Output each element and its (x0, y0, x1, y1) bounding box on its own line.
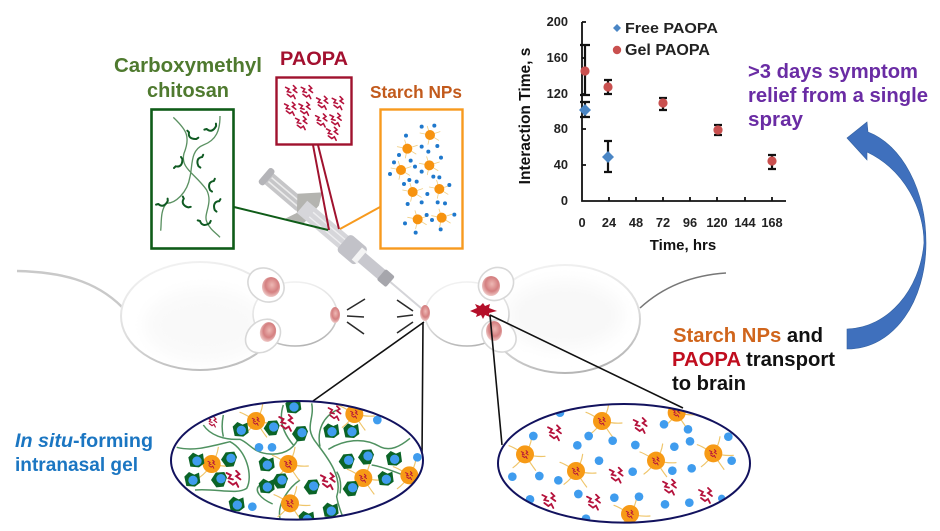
free blue dots (248, 416, 422, 511)
left ellipse: gel composition (171, 397, 429, 526)
ear bottom (476, 313, 522, 359)
axes (582, 22, 786, 201)
x tick labels: 168 (761, 215, 783, 230)
nanoparticles (509, 396, 733, 530)
scatter chart: interaction time (517, 14, 786, 254)
label: in situ-forming intranasal gel: intranasal gel (15, 454, 138, 476)
head (253, 282, 337, 346)
free PAOPA points (579, 104, 614, 163)
x tick labels: 120 (706, 215, 728, 230)
label: Carboxymethyl chitosan: Carboxymethyl (114, 54, 262, 77)
label: Carboxymethyl chitosan (114, 54, 262, 102)
right ellipse: gel released in brain (498, 396, 750, 530)
inner ear top (482, 276, 500, 296)
gel chains (177, 403, 410, 518)
body (490, 265, 640, 373)
y tick labels (547, 14, 568, 208)
peptide squiggles (285, 86, 344, 140)
y tick labels: 160 (547, 50, 568, 65)
nanoparticles (196, 397, 429, 519)
whiskers right mouse (397, 300, 413, 333)
y tick labels: 0 (561, 193, 568, 208)
x tick labels: 96 (683, 215, 697, 230)
PAOPA squiggles (208, 406, 341, 489)
inner ear bottom (258, 320, 278, 344)
whiskers left mouse (347, 299, 365, 334)
label: PAOPA: PAOPA (280, 49, 348, 70)
nanoparticles and blue dots (388, 124, 456, 235)
x tick labels: 48 (629, 215, 643, 230)
panel: starch NPs box (380, 110, 462, 248)
legend (613, 21, 719, 59)
left mouse (17, 261, 340, 370)
right mouse (420, 261, 726, 373)
y tick labels: 80 (554, 121, 568, 136)
legend: Gel PAOPA (625, 42, 710, 59)
ellipse outline (498, 404, 750, 523)
label: in situ-forming intranasal gel (15, 430, 153, 476)
x tick labels: 24 (602, 215, 617, 230)
callout: symptom relief: spray (748, 109, 804, 131)
blue dots (508, 408, 736, 523)
callout: transport to brain: to brain (672, 373, 746, 395)
callout: transport to brain: Starch NPs and (673, 325, 823, 347)
x tick labels: 72 (656, 215, 670, 230)
x tick labels (578, 215, 783, 230)
ear top (472, 261, 520, 307)
inner ear bottom (486, 321, 502, 341)
callout: symptom relief (748, 61, 928, 131)
y tick labels: 120 (547, 86, 568, 101)
ear bottom (239, 312, 287, 360)
panel: carboxymethyl chitosan box (152, 110, 234, 248)
label: Starch NPs: Starch NPs (370, 82, 462, 102)
y axis title: Interaction Time, s (517, 48, 534, 184)
head (425, 282, 509, 346)
x axis title: Time, hrs (650, 237, 716, 254)
tail (640, 273, 726, 308)
zoom lines to ellipses (313, 315, 683, 457)
callout: symptom relief: relief from a single (748, 85, 928, 107)
crosslinked chitosan units (184, 399, 402, 526)
label: Carboxymethyl chitosan: chitosan (147, 80, 229, 102)
y tick labels: 200 (547, 14, 568, 29)
ear top (241, 261, 291, 309)
body (121, 262, 279, 370)
x tick labels: 144 (734, 215, 757, 230)
y tick labels: 40 (554, 157, 568, 172)
ellipse outline (171, 401, 423, 520)
nose (330, 307, 340, 323)
tail (17, 271, 122, 307)
brain target burst (470, 303, 497, 319)
arrow: curved blue (847, 122, 926, 349)
connector lines from boxes to syringe (234, 145, 380, 230)
gel PAOPA points (580, 66, 777, 166)
callout: transport to brain: PAOPA transport (672, 349, 835, 371)
error bars (580, 45, 776, 172)
legend: Free PAOPA (625, 21, 719, 37)
label: in situ-forming intranasal gel: In situ-forming (15, 430, 153, 452)
syringe (250, 156, 439, 327)
callout: transport to brain (672, 325, 835, 395)
x tick labels: 0 (578, 215, 586, 230)
inner ear top (262, 277, 280, 297)
callout: symptom relief: >3 days symptom (748, 61, 918, 83)
nose (420, 305, 430, 321)
PAOPA squiggles (542, 418, 712, 510)
panel: PAOPA box (276, 78, 352, 144)
polymer chains and binding groups (156, 116, 223, 237)
